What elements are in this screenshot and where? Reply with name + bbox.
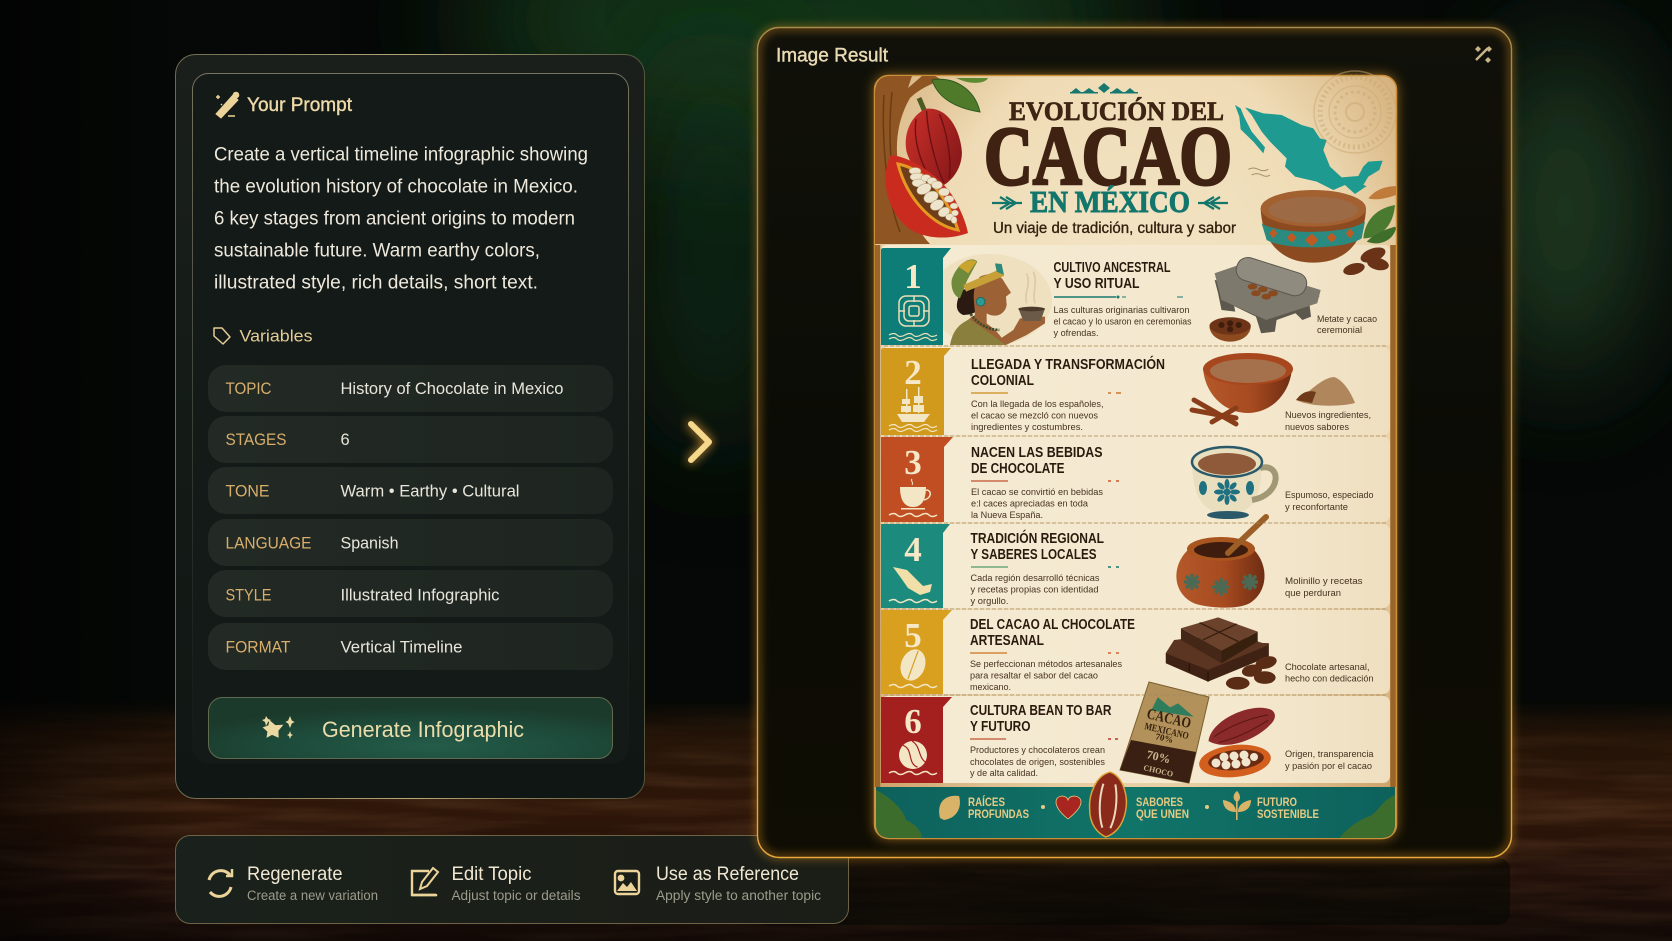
row 3 caption: y reconfortante (1285, 502, 1348, 513)
row 4 text (970, 529, 1119, 607)
row 5: artesanal: 5 (904, 616, 922, 655)
cacao pod open (886, 155, 968, 238)
icon: leaf (939, 796, 960, 820)
variable row: tone: Warm • Earthy • Cultural (340, 482, 520, 500)
row 3 caption: Espumoso, especiado (1285, 490, 1374, 501)
row 3 text: DE CHOCOLATE (971, 461, 1065, 477)
illustration: cacao bar: 70% (1155, 731, 1174, 745)
footer label: raices (968, 796, 1029, 821)
prompt paragraph: sustainable future. Warm earthy colors, (214, 240, 540, 262)
prompt paragraph: Create a vertical timeline infographic showing (214, 144, 588, 166)
title: cacao: CACAO (984, 110, 1232, 203)
cacao pod red (899, 103, 968, 191)
tree trunk (875, 76, 942, 244)
poster glow (874, 75, 1397, 839)
row 5 text (970, 617, 1135, 693)
variable row: language (208, 519, 613, 566)
infographic poster (874, 71, 1396, 838)
ornament top (1070, 83, 1138, 94)
stem (919, 98, 925, 112)
icon: magic wand (216, 92, 239, 118)
row 5 text: para resaltar el sabor del cacao (970, 670, 1098, 682)
beans (1342, 244, 1390, 277)
regenerate label: Regenerate (247, 864, 342, 885)
illustration backdrop (928, 254, 1052, 346)
leaf right (1363, 205, 1396, 243)
row 1 text: el cacao y lo usaron en ceremonias (1054, 316, 1192, 328)
row 2: llegada: 2 (904, 353, 922, 392)
row 5 text: mexicano. (970, 682, 1011, 693)
illustration: cacao bar: CACAO (1145, 706, 1193, 732)
row 1 caption: ceremonial (1317, 325, 1362, 336)
row 5 text: DEL CACAO AL CHOCOLATE (970, 617, 1135, 633)
row 3 text: El cacao se convirtió en bebidas (971, 487, 1103, 498)
row 3 text (971, 445, 1119, 521)
action: edit topic (412, 864, 581, 903)
row 4 text: Cada región desarrolló técnicas (970, 573, 1100, 584)
variable row: topic (208, 365, 613, 412)
panel: prompt text card (192, 74, 628, 764)
icon: sparkles (262, 716, 295, 740)
row 1 text: Y USO RITUAL (1054, 276, 1140, 292)
arrow: chevron to result (691, 424, 709, 460)
variable row: topic: TOPIC (226, 380, 272, 398)
footer label: raices: RAÍCES (968, 796, 1005, 809)
icon: tag (214, 328, 230, 344)
row 5: artesanal (881, 610, 1390, 694)
footer label: sabores: SABORES (1136, 797, 1183, 809)
footer label: sabores (1136, 797, 1189, 821)
row 2: llegada (881, 347, 1390, 435)
action: use as reference (615, 864, 821, 903)
row 1 text: Las culturas originarias cultivaron (1054, 305, 1190, 316)
footer label: futuro: FUTURO (1257, 797, 1297, 809)
prompt paragraph: 6 key stages from ancient origins to modern (214, 208, 575, 230)
row 4 caption: Molinillo y recetas (1285, 576, 1363, 587)
edit label: Edit Topic (452, 864, 532, 885)
row 2 text: ingredientes y costumbres. (971, 422, 1083, 433)
row 2 caption (1285, 410, 1371, 433)
icon: expand wand (1475, 46, 1492, 63)
variable row: format: FORMAT (226, 638, 290, 656)
row 1 caption (1317, 314, 1377, 336)
icon: image (615, 871, 639, 894)
row 6: bean to bar: 6 (904, 702, 922, 741)
panel: action bar (176, 836, 848, 924)
title: evolucion del: EVOLUCIÓN DEL (1009, 97, 1224, 126)
illustration: metate (1209, 255, 1321, 342)
row 6 text: Productores y chocolateros crean (970, 745, 1105, 756)
title: en mexico: EN MÉXICO (1030, 184, 1190, 219)
row 5 caption (1285, 662, 1374, 684)
row 3 text: e:l caces apreciadas en toda (971, 498, 1089, 510)
row 5 caption: Chocolate artesanal, (1285, 662, 1370, 673)
prompt paragraph (214, 144, 588, 294)
reference hint: Apply style to another topic (656, 888, 821, 903)
row dividers (884, 346, 1388, 695)
row 3 text: NACEN LAS BEBIDAS (971, 445, 1103, 461)
regenerate hint: Create a new variation (247, 888, 378, 903)
variable row: style: STYLE (226, 586, 272, 604)
heading: your prompt: Your Prompt (247, 94, 353, 116)
row 5 text: ARTESANAL (970, 633, 1044, 649)
prompt paragraph: illustrated style, rich details, short text. (214, 272, 538, 294)
row 3: bebidas: 3 (904, 443, 922, 482)
icon: refresh (209, 869, 232, 896)
row 3: bebidas (881, 437, 1390, 522)
row 1: cultivo ancestral: 1 (904, 257, 922, 296)
icon: pencil note (412, 868, 438, 895)
footer label: sabores: QUE UNEN (1136, 809, 1189, 821)
leaf top (932, 78, 988, 112)
row 4 caption (1285, 576, 1363, 599)
icon: heart (1056, 796, 1081, 819)
variable row: language: LANGUAGE (226, 534, 312, 552)
row 6 text: CULTURA BEAN TO BAR (970, 703, 1112, 719)
row 2 caption: Nuevos ingredientes, (1285, 410, 1371, 421)
illustration: cacao bar (1120, 682, 1209, 783)
footer label: futuro: SOSTENIBLE (1257, 809, 1319, 821)
row 6: bean to bar (881, 682, 1390, 783)
illustration: cup (1192, 447, 1276, 519)
footer label: raices: PROFUNDAS (968, 809, 1029, 821)
row 2 caption: nuevos sabores (1285, 422, 1349, 433)
icon: ship (897, 387, 930, 422)
illustration: cacao pods (1198, 700, 1280, 781)
chocolate bowl header (1261, 190, 1366, 263)
leaves left and right (876, 790, 1395, 838)
row 6 caption: y pasión por el cacao (1285, 761, 1372, 772)
row 4 text: y recetas propias con identidad (970, 584, 1098, 596)
variable row: language: Spanish (340, 534, 398, 552)
icon: sprout (1223, 791, 1251, 820)
row 1: cultivo ancestral (881, 245, 1390, 346)
row 4 caption: que perduran (1285, 588, 1341, 599)
laurels (992, 197, 1228, 209)
icon: coffee-like bean (894, 736, 932, 774)
variable row: tone: TONE (226, 482, 270, 500)
prompt paragraph: the evolution history of chocolate in Mexico. (214, 176, 578, 198)
edit hint: Adjust topic or details (452, 888, 581, 903)
row 3 caption (1285, 490, 1374, 513)
side frame (878, 245, 1393, 787)
row 6 caption (1285, 749, 1374, 772)
row 1 caption: Metate y cacao (1317, 314, 1377, 325)
row 6 text: Y FUTURO (970, 719, 1030, 735)
row 6 text (970, 703, 1118, 779)
row 2 text: el cacao se mezcló con nuevos (971, 410, 1098, 422)
aztec sun stamp (1314, 71, 1396, 153)
heading: variables: Variables (240, 326, 312, 346)
row 4 text: TRADICIÓN REGIONAL (970, 529, 1104, 547)
variable row: stages (208, 416, 613, 463)
row 6 text: chocolates de origen, sostenibles (970, 757, 1105, 768)
illustration: clay bowl (1192, 353, 1355, 424)
icon: bean (896, 646, 930, 684)
illustration: figure (950, 259, 1045, 345)
row 4: tradicion (881, 517, 1390, 608)
button: generate infographic (208, 698, 612, 758)
panel: image result (758, 28, 1512, 858)
row 6 text: y de alta calidad. (970, 768, 1038, 779)
row 4: tradicion: 4 (904, 530, 922, 569)
reference label: Use as Reference (656, 864, 799, 885)
bottom bar shadow extension (757, 858, 1510, 925)
illustration: cacao bar: MEXICANO (1143, 721, 1190, 742)
illustration: clay pot (1176, 517, 1266, 608)
icon: map glyph (893, 567, 932, 595)
variable row: format (208, 623, 613, 670)
illustration: cacao bar: CHOCO (1143, 763, 1174, 779)
heading: image result: Image Result (776, 46, 889, 66)
variable row: format: Vertical Timeline (340, 638, 462, 656)
illustration: chocolate (1166, 617, 1278, 690)
illustration: cacao bar: 70% (1145, 747, 1172, 766)
icon: cacao pod (1087, 771, 1129, 838)
variable row: stages: 6 (340, 431, 350, 449)
row 2 text: LLEGADA Y TRANSFORMACIÓN (971, 355, 1165, 373)
subtitle: Un viaje de tradición, cultura y sabor (993, 220, 1236, 237)
variable row: stages: STAGES (226, 431, 286, 449)
row 6 caption: Origen, transparencia (1285, 749, 1374, 760)
row 2 text: Con la llegada de los españoles, (971, 399, 1104, 410)
variable row: style (208, 570, 613, 617)
footer dots (1041, 805, 1209, 809)
row 1 text: CULTIVO ANCESTRAL (1054, 260, 1171, 276)
variable row: topic: History of Chocolate in Mexico (340, 380, 564, 398)
variable row: style: Illustrated Infographic (340, 586, 500, 604)
row 2 text (971, 355, 1165, 433)
row 5 text: Se perfeccionan métodos artesanales (970, 659, 1122, 670)
poster header (875, 71, 1396, 244)
icon: glyph (899, 296, 929, 326)
action: regenerate (209, 864, 378, 903)
row 3 text: la Nueva España. (971, 510, 1043, 521)
row 4 text: Y SABERES LOCALES (970, 547, 1097, 563)
row 4 text: y orgullo. (970, 596, 1008, 607)
panel: prompt form (176, 54, 644, 798)
footer label: futuro (1257, 797, 1319, 821)
icon: cup (900, 479, 930, 510)
row 2 text: COLONIAL (971, 373, 1034, 389)
button label: Generate Infographic (322, 717, 524, 742)
row 5 caption: hecho con dedicación (1285, 674, 1374, 684)
poster footer band (876, 771, 1395, 838)
row 1 text (1054, 260, 1192, 339)
map of mexico (1235, 105, 1396, 199)
row 1 text: y ofrendas. (1054, 328, 1098, 339)
variable row: tone (208, 467, 613, 514)
